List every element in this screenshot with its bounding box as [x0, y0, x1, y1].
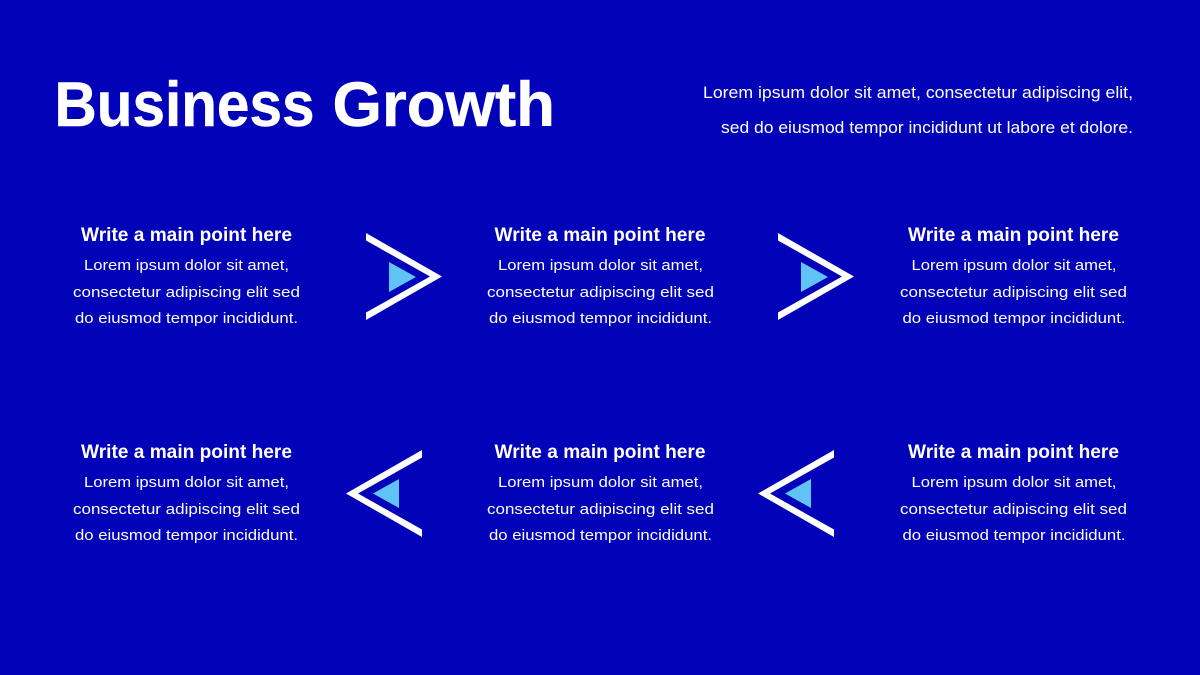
panel: point 6: Write a main point here [908, 442, 1119, 463]
panel: point 5 [487, 442, 714, 544]
panel: point 1: Lorem ipsum dolor sit amet, [84, 257, 289, 274]
panel: point 3: consectetur adipiscing elit sed [900, 284, 1127, 301]
panel: point 1: consectetur adipiscing elit sed [73, 284, 300, 301]
panel: point 4: Write a main point here [81, 442, 292, 463]
panel: point 3: Lorem ipsum dolor sit amet, [912, 257, 1116, 274]
intro text: Lorem ipsum dolor sit amet, consectetur adipiscing elit, [703, 84, 1133, 102]
panel: point 1: Write a main point here [81, 225, 292, 246]
title: Growth [332, 70, 555, 140]
icon: left arrow 2 [758, 450, 834, 537]
panel: point 5: Lorem ipsum dolor sit amet, [498, 474, 703, 491]
intro text [703, 84, 1133, 137]
panel: point 4: do eiusmod tempor incididunt. [75, 527, 298, 544]
panel: point 2: consectetur adipiscing elit sed [487, 284, 714, 301]
panel: point 6: Lorem ipsum dolor sit amet, [912, 474, 1116, 491]
panel: point 1 [73, 225, 300, 327]
icon: right arrow 1 [366, 233, 442, 320]
panel: point 4 [73, 442, 300, 544]
panel: point 6 [900, 442, 1127, 544]
panel: point 4: consectetur adipiscing elit sed [73, 501, 300, 518]
panel: point 5: consectetur adipiscing elit sed [487, 501, 714, 518]
panel: point 2: Write a main point here [494, 225, 706, 246]
panel: point 6: do eiusmod tempor incididunt. [902, 527, 1126, 544]
panel: point 3 [900, 225, 1127, 327]
panel: point 2: do eiusmod tempor incididunt. [489, 310, 712, 327]
title [54, 70, 555, 140]
intro text: sed do eiusmod tempor incididunt ut labore et dolore. [721, 119, 1133, 137]
panel: point 5: Write a main point here [494, 442, 706, 463]
panel: point 5: do eiusmod tempor incididunt. [489, 527, 712, 544]
icon: left arrow 1 [346, 450, 422, 537]
panel: point 4: Lorem ipsum dolor sit amet, [84, 474, 289, 491]
panel: point 2 [487, 225, 714, 327]
title: Business [54, 70, 314, 140]
panel: point 3: do eiusmod tempor incididunt. [902, 310, 1126, 327]
panel: point 1: do eiusmod tempor incididunt. [75, 310, 298, 327]
panel: point 3: Write a main point here [908, 225, 1119, 246]
panel: point 6: consectetur adipiscing elit sed [900, 501, 1127, 518]
panel: point 2: Lorem ipsum dolor sit amet, [498, 257, 703, 274]
icon: right arrow 2 [778, 233, 854, 320]
